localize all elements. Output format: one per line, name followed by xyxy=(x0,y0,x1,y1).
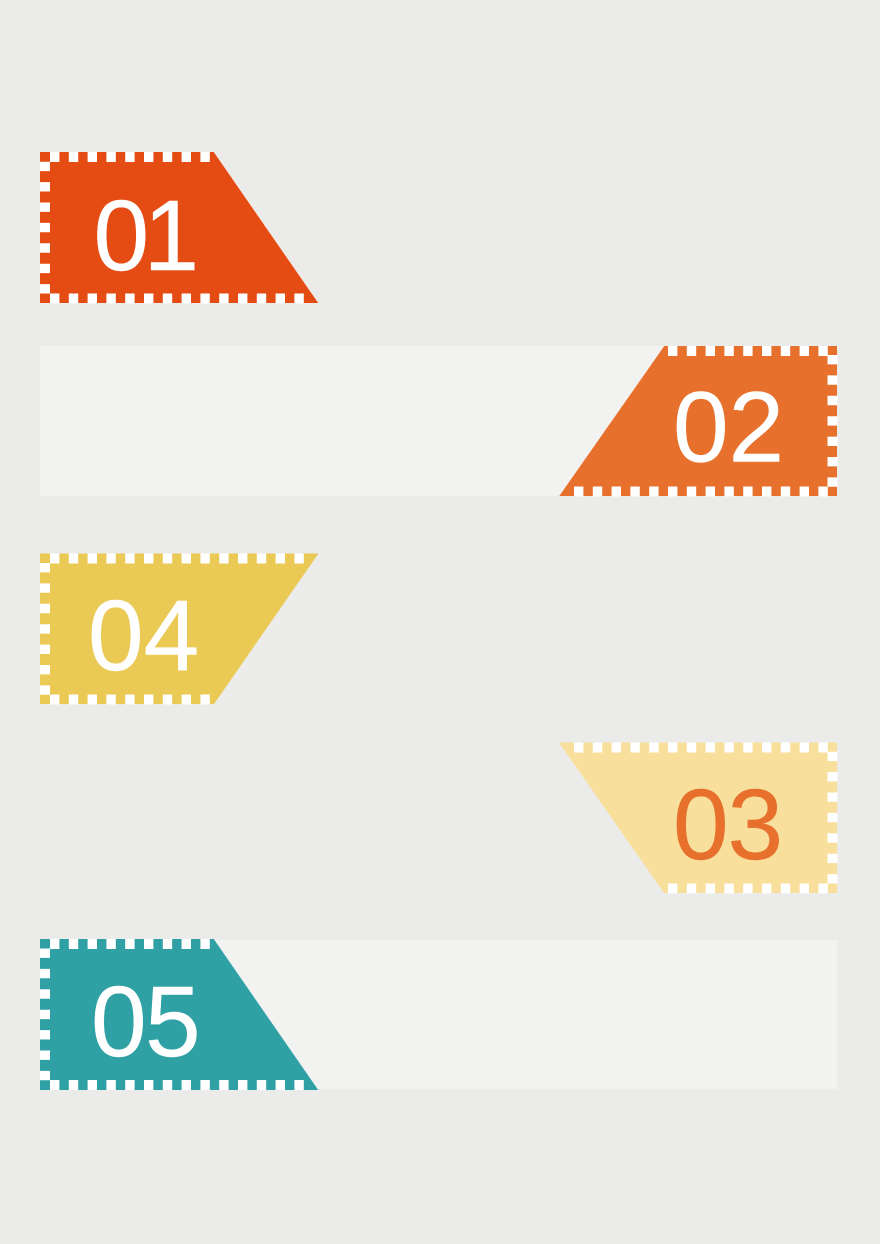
banner 03 xyxy=(559,742,837,893)
number 04: 04 xyxy=(88,580,199,692)
panel: bar 04 background xyxy=(214,557,837,704)
number 02: 02 xyxy=(673,372,784,484)
number 01: 01 xyxy=(94,180,199,292)
banner 02 xyxy=(559,346,837,496)
number 05: 05 xyxy=(91,966,201,1078)
banner 05 xyxy=(40,939,318,1090)
banner 01 xyxy=(40,152,318,303)
number 03: 03 xyxy=(673,769,783,881)
banner 04 xyxy=(40,554,318,704)
panel: bar 02 background xyxy=(40,346,680,496)
panel: bar 05 background xyxy=(200,940,837,1089)
